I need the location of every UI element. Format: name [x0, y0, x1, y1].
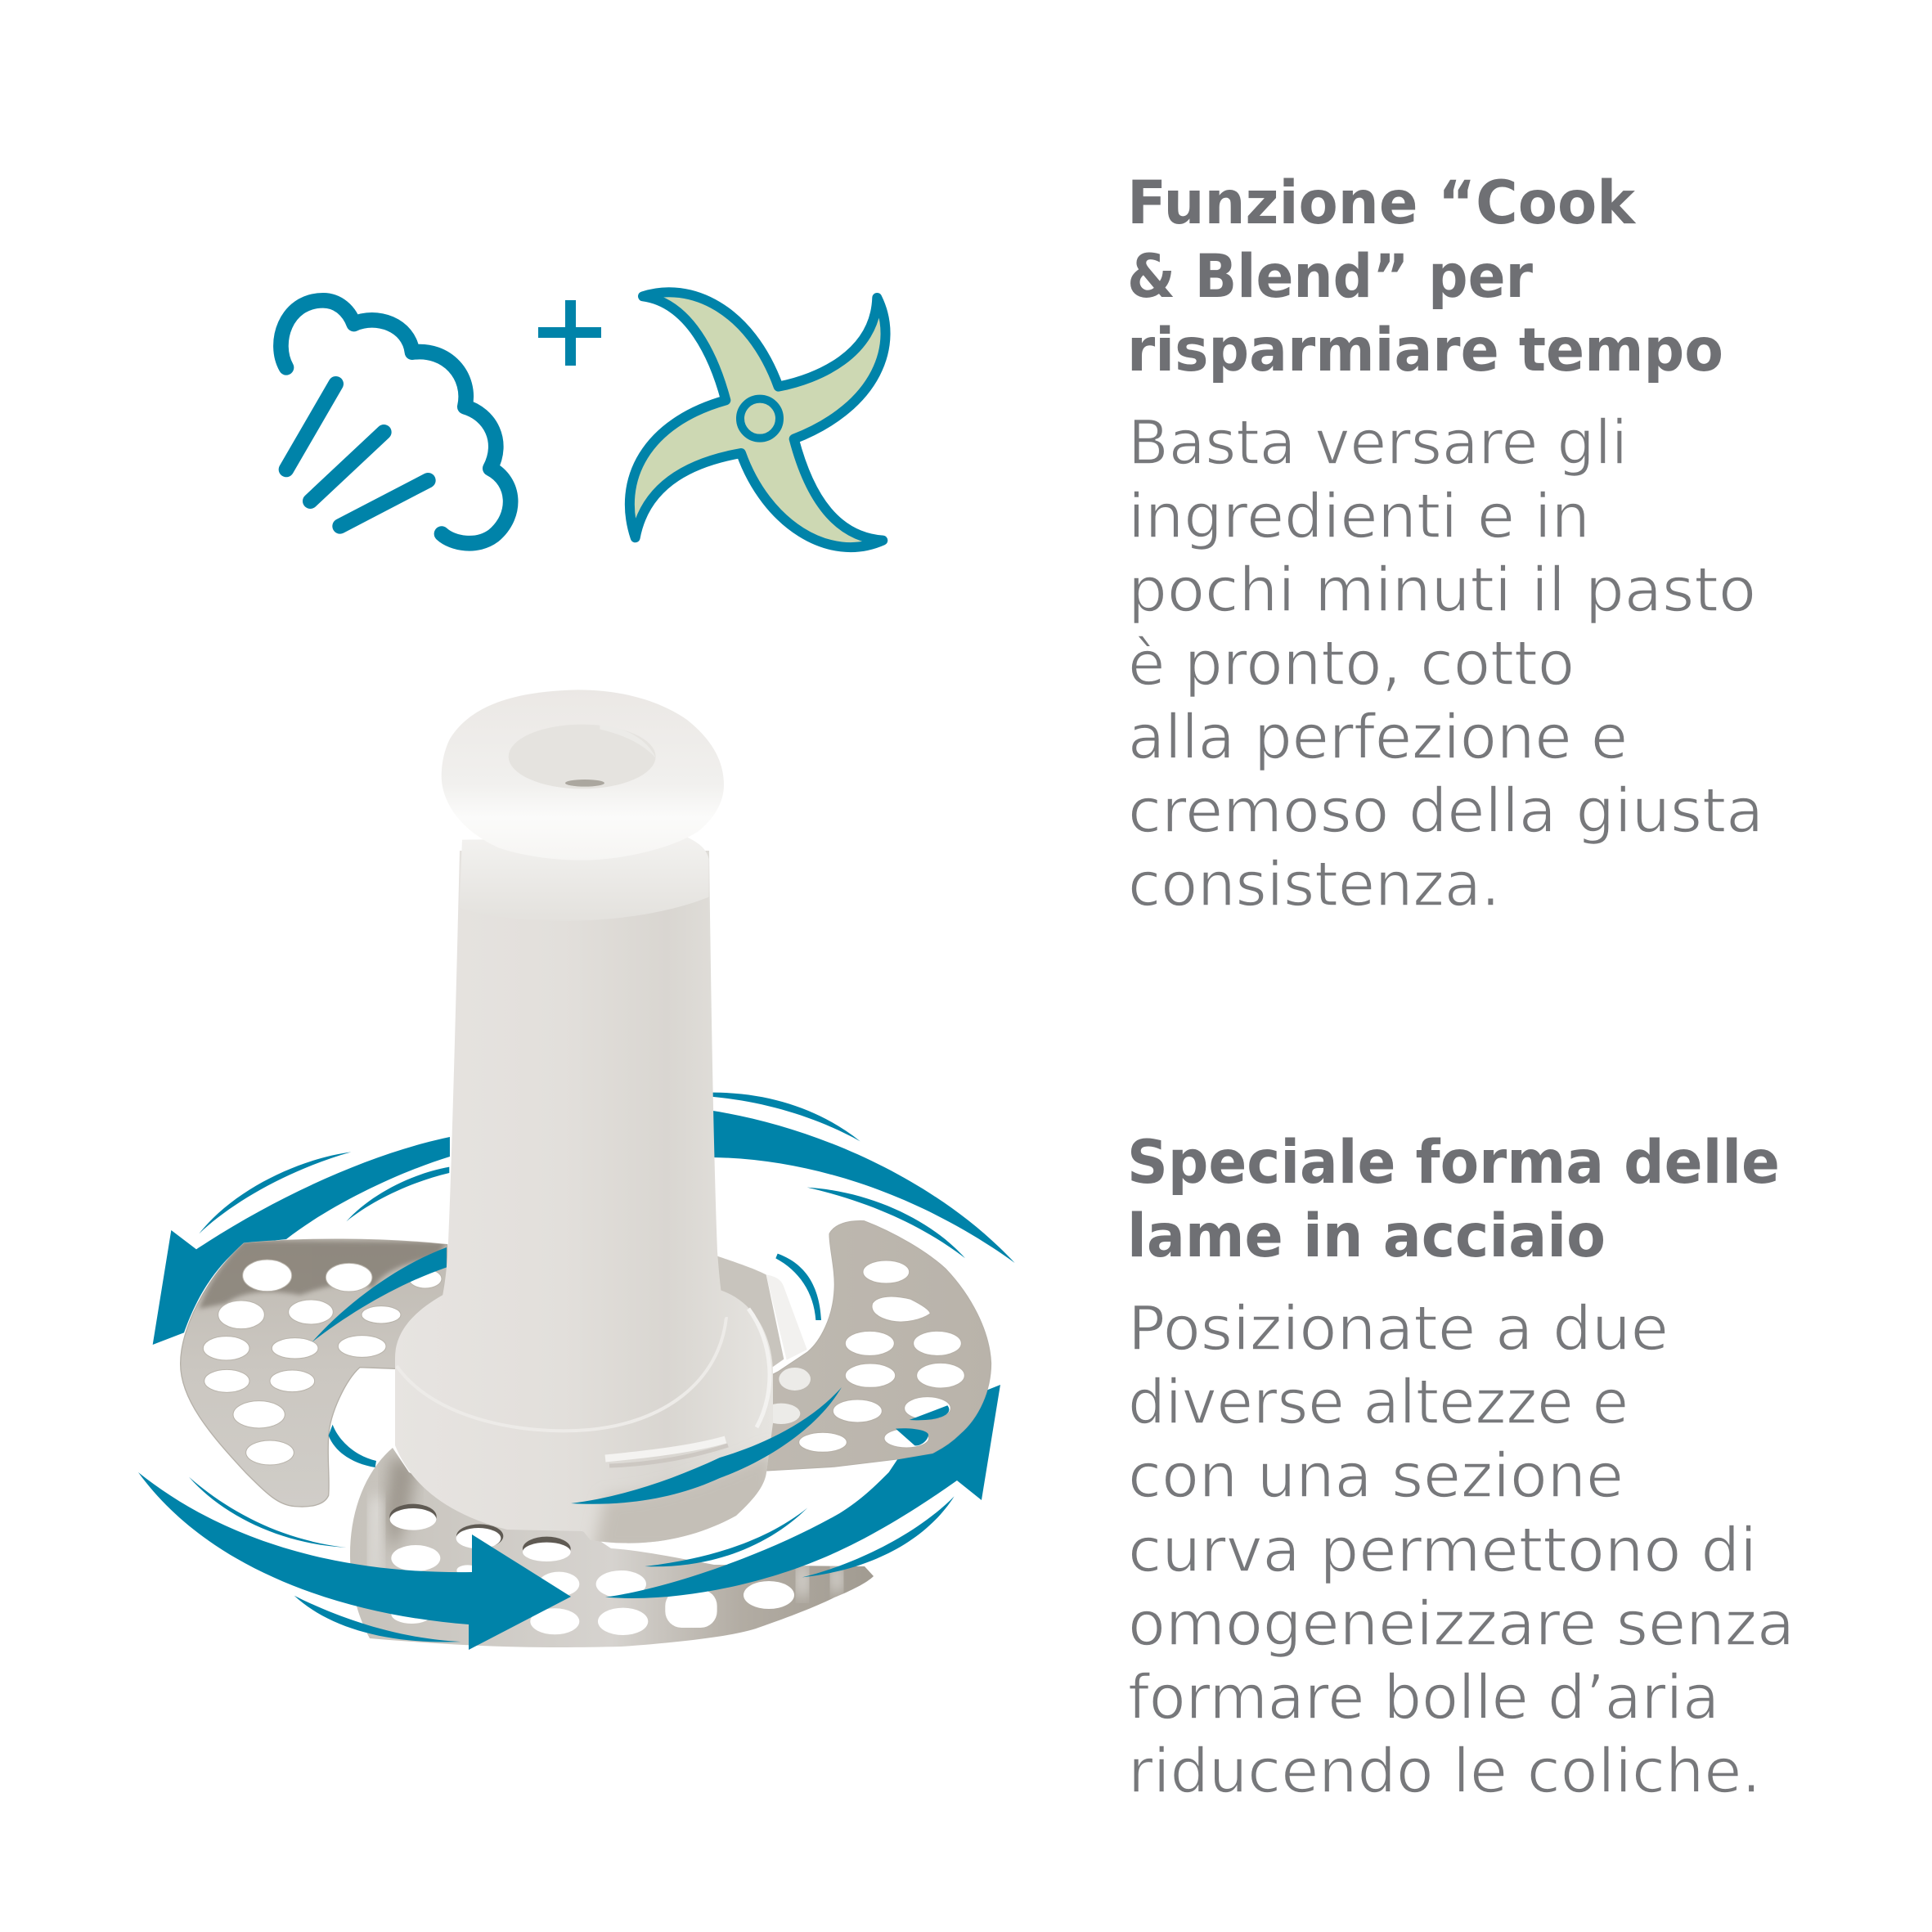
text block: Basta versare: alla perfezione e	[1128, 701, 1628, 773]
product photo: blade assembly with rotation arrows	[138, 690, 1015, 1650]
blade: bottom	[350, 1448, 874, 1647]
text block: Basta versare: ingredienti e in	[1128, 480, 1590, 552]
blade: bottom hole shadows	[389, 1504, 571, 1561]
text block: Posizionate a due: con una sezione	[1128, 1440, 1624, 1512]
blade: tail hole	[744, 1581, 794, 1609]
arrow: bottom right with head	[605, 1385, 1000, 1598]
arrow: far right thin swirl	[802, 1496, 955, 1577]
hub: lower shadow	[591, 1455, 769, 1543]
blade: bottom holes	[390, 1508, 717, 1635]
stem: cap hole	[509, 725, 656, 789]
text block: Basta versare: consistenza.	[1128, 848, 1500, 920]
arrow: small right curve	[775, 1254, 821, 1320]
text block: Basta versare	[1128, 407, 1764, 920]
heading: Funzione Cook & Blend: risparmiare tempo	[1127, 316, 1723, 385]
text block: Posizionate a due: omogeneizzare senza	[1128, 1588, 1795, 1660]
arrow: left thin swirl	[199, 1152, 351, 1233]
blade: left holes	[203, 1260, 442, 1465]
arrow: lower left thin swirl	[189, 1477, 346, 1548]
infographic canvas	[138, 178, 1788, 1793]
heading: Speciale forma delle lame	[1127, 1128, 1780, 1271]
blade: rear piece	[703, 1251, 784, 1385]
text block: Basta versare: Basta versare gli	[1128, 407, 1628, 479]
icon: plus sign	[538, 300, 601, 366]
text block: Posizionate a due: diverse altezze e	[1128, 1366, 1629, 1438]
text block: Basta versare: pochi minuti il pasto	[1128, 554, 1756, 626]
arrow: bottom left with head	[138, 1472, 571, 1650]
heading: Speciale forma delle lame: Speciale forma delle	[1127, 1128, 1780, 1197]
arrow: bottom thin swirl	[294, 1596, 461, 1642]
stem: cap hole highlight	[600, 726, 656, 758]
arrow: lower right thin swirl	[645, 1507, 807, 1566]
hub: base of stem	[395, 1290, 773, 1543]
blade: rear white tab	[766, 1274, 807, 1360]
heading: Funzione Cook & Blend: Funzione “Cook	[1127, 168, 1636, 238]
hub: ridges	[397, 1309, 770, 1466]
arrow: streak over left blade	[312, 1247, 447, 1342]
icon: blade	[630, 292, 886, 547]
heading: Funzione Cook & Blend: & Blend” per	[1127, 242, 1533, 312]
text block: Basta versare: è pronto, cotto	[1128, 627, 1575, 699]
heading: Speciale forma delle lame: lame in acciaio	[1127, 1202, 1606, 1271]
icon: steam cloud	[281, 300, 510, 543]
heading: Funzione Cook & Blend	[1127, 168, 1723, 385]
blade: right hub-side holes	[720, 1368, 811, 1449]
arrow: top right swirl	[711, 1111, 1015, 1263]
stem: screw	[565, 780, 604, 787]
blade: bottom shading	[370, 1456, 842, 1597]
text block: Posizionate a due: Posizionate a due	[1128, 1292, 1669, 1364]
blade: left	[181, 1239, 447, 1507]
arrow: small left curve	[329, 1425, 376, 1467]
blade: right holes	[799, 1260, 964, 1452]
blade: right	[720, 1221, 991, 1478]
text block: Posizionate a due: riducendo le coliche.	[1128, 1735, 1761, 1807]
text block: Posizionate a due	[1128, 1292, 1795, 1807]
arrow: top thin swirl	[711, 1093, 860, 1141]
arrow: left inner thin swirl	[346, 1167, 449, 1221]
text block: Posizionate a due: curva permettono di	[1128, 1514, 1757, 1586]
arrow: big centre streak	[571, 1387, 842, 1504]
stem: main tube	[438, 851, 726, 1341]
stem: neck collar	[460, 837, 709, 921]
arrow: top left with head	[153, 1137, 450, 1345]
arrow: right thin swirl	[807, 1188, 965, 1258]
blade: left shading	[199, 1241, 447, 1309]
arrow: blue seen through holes	[896, 1405, 949, 1445]
stem: cap ring	[442, 690, 724, 860]
text block: Basta versare: cremoso della giusta	[1128, 775, 1764, 847]
text block: Posizionate a due: formare bolle d’aria	[1128, 1661, 1719, 1733]
